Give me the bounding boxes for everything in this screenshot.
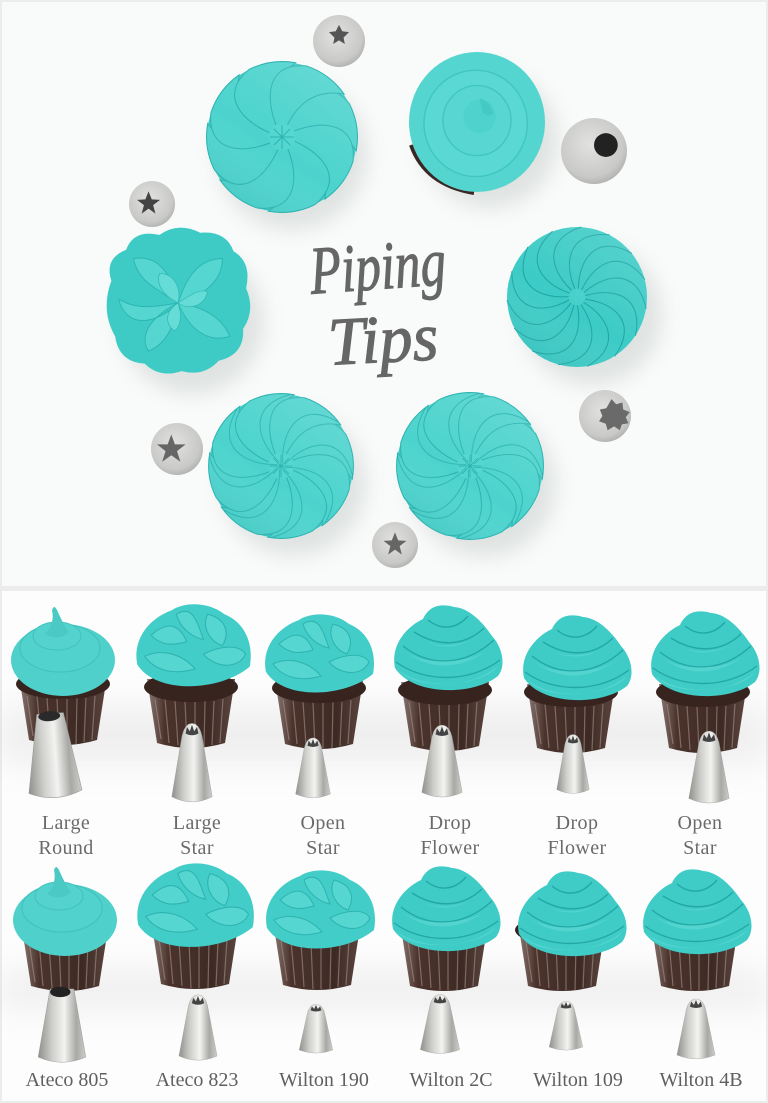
cupcake: drop flower 2: [523, 615, 632, 753]
row 1 labels: [38, 812, 722, 859]
cupcake: open star 2: [651, 611, 760, 753]
row 1 nozzles: [23, 709, 729, 803]
cupcake: open star: [265, 614, 374, 749]
nozzle: open star 2: [689, 731, 729, 803]
nozzle: top center: [313, 15, 365, 67]
row 1 labels: Open: [678, 812, 722, 834]
cupcake: top view drop flower right: [385, 381, 555, 551]
row 1 labels: Drop: [429, 812, 471, 834]
nozzle: Wilton 4B: [677, 999, 715, 1059]
nozzle: Wilton 190: [299, 1004, 333, 1053]
row 1 labels: Drop: [556, 812, 598, 834]
row 1 labels: Flower: [547, 837, 607, 859]
title: Tips: [326, 298, 440, 380]
cupcake: top view wheel swirl: [195, 50, 369, 224]
nozzle: Wilton 2C: [420, 995, 460, 1053]
cupcake: top view large round: [409, 52, 545, 193]
row 1 labels: Large: [173, 812, 221, 834]
cupcake: drop flower: [394, 605, 503, 751]
nozzle: Ateco 823: [179, 995, 217, 1060]
cupcake: large star: [136, 604, 251, 748]
cupcake: Wilton 4B: [643, 869, 752, 991]
cupcake: Wilton 190: [266, 870, 375, 990]
row 2 nozzles: [38, 987, 715, 1062]
row 1 labels: Star: [180, 837, 214, 859]
row 2 labels: Wilton 190: [279, 1069, 369, 1091]
row 1 cupcakes: [11, 604, 760, 753]
row 2 labels: Ateco 823: [156, 1069, 238, 1091]
soft shadows: [120, 72, 662, 557]
cupcake: Ateco 805: [13, 867, 117, 991]
row 2 labels: Wilton 109: [533, 1069, 623, 1091]
nozzle: Ateco 805: [38, 987, 86, 1062]
nozzle: large star: [172, 723, 212, 802]
title: Piping: [306, 223, 448, 309]
cupcake: Ateco 823: [137, 863, 254, 989]
nozzle: star left bottom: [151, 423, 203, 475]
cupcake: top view ruffled: [107, 228, 250, 374]
nozzle: large round: [23, 709, 82, 799]
nozzle: flower bottom: [372, 522, 418, 568]
nozzle: open star right: [579, 390, 631, 442]
nozzle: drop flower: [422, 725, 462, 797]
panel: top overhead photo: [2, 2, 766, 586]
row 1 labels: Open: [301, 812, 345, 834]
row 2 labels: Ateco 805: [26, 1069, 108, 1091]
cupcake: top view drop flower left: [198, 383, 364, 549]
nozzle: Wilton 109: [549, 1001, 583, 1050]
row 2 labels: Wilton 4B: [659, 1069, 743, 1091]
row 2 labels: [26, 1069, 743, 1091]
cupcake: large round: [11, 607, 115, 745]
nozzle: star left top: [129, 181, 175, 227]
row 1 labels: Round: [38, 837, 94, 859]
cupcake: Wilton 109: [515, 871, 627, 991]
row 1 labels: Flower: [420, 837, 480, 859]
row 2 cupcakes: [13, 863, 752, 991]
row 1 labels: Star: [683, 837, 717, 859]
nozzle: open star: [296, 738, 330, 798]
row 1 labels: Large: [42, 812, 90, 834]
title: [306, 223, 448, 380]
cupcake: top view fine swirl: [501, 221, 654, 374]
shadow bands: [0, 705, 768, 1010]
row 1 labels: Star: [306, 837, 340, 859]
panel: bottom side view photo: [0, 591, 768, 1101]
row 2 labels: Wilton 2C: [409, 1069, 493, 1091]
cupcake: Wilton 2C: [392, 866, 501, 991]
nozzle: drop flower 2: [557, 735, 589, 793]
nozzle: round opening: [561, 118, 627, 184]
